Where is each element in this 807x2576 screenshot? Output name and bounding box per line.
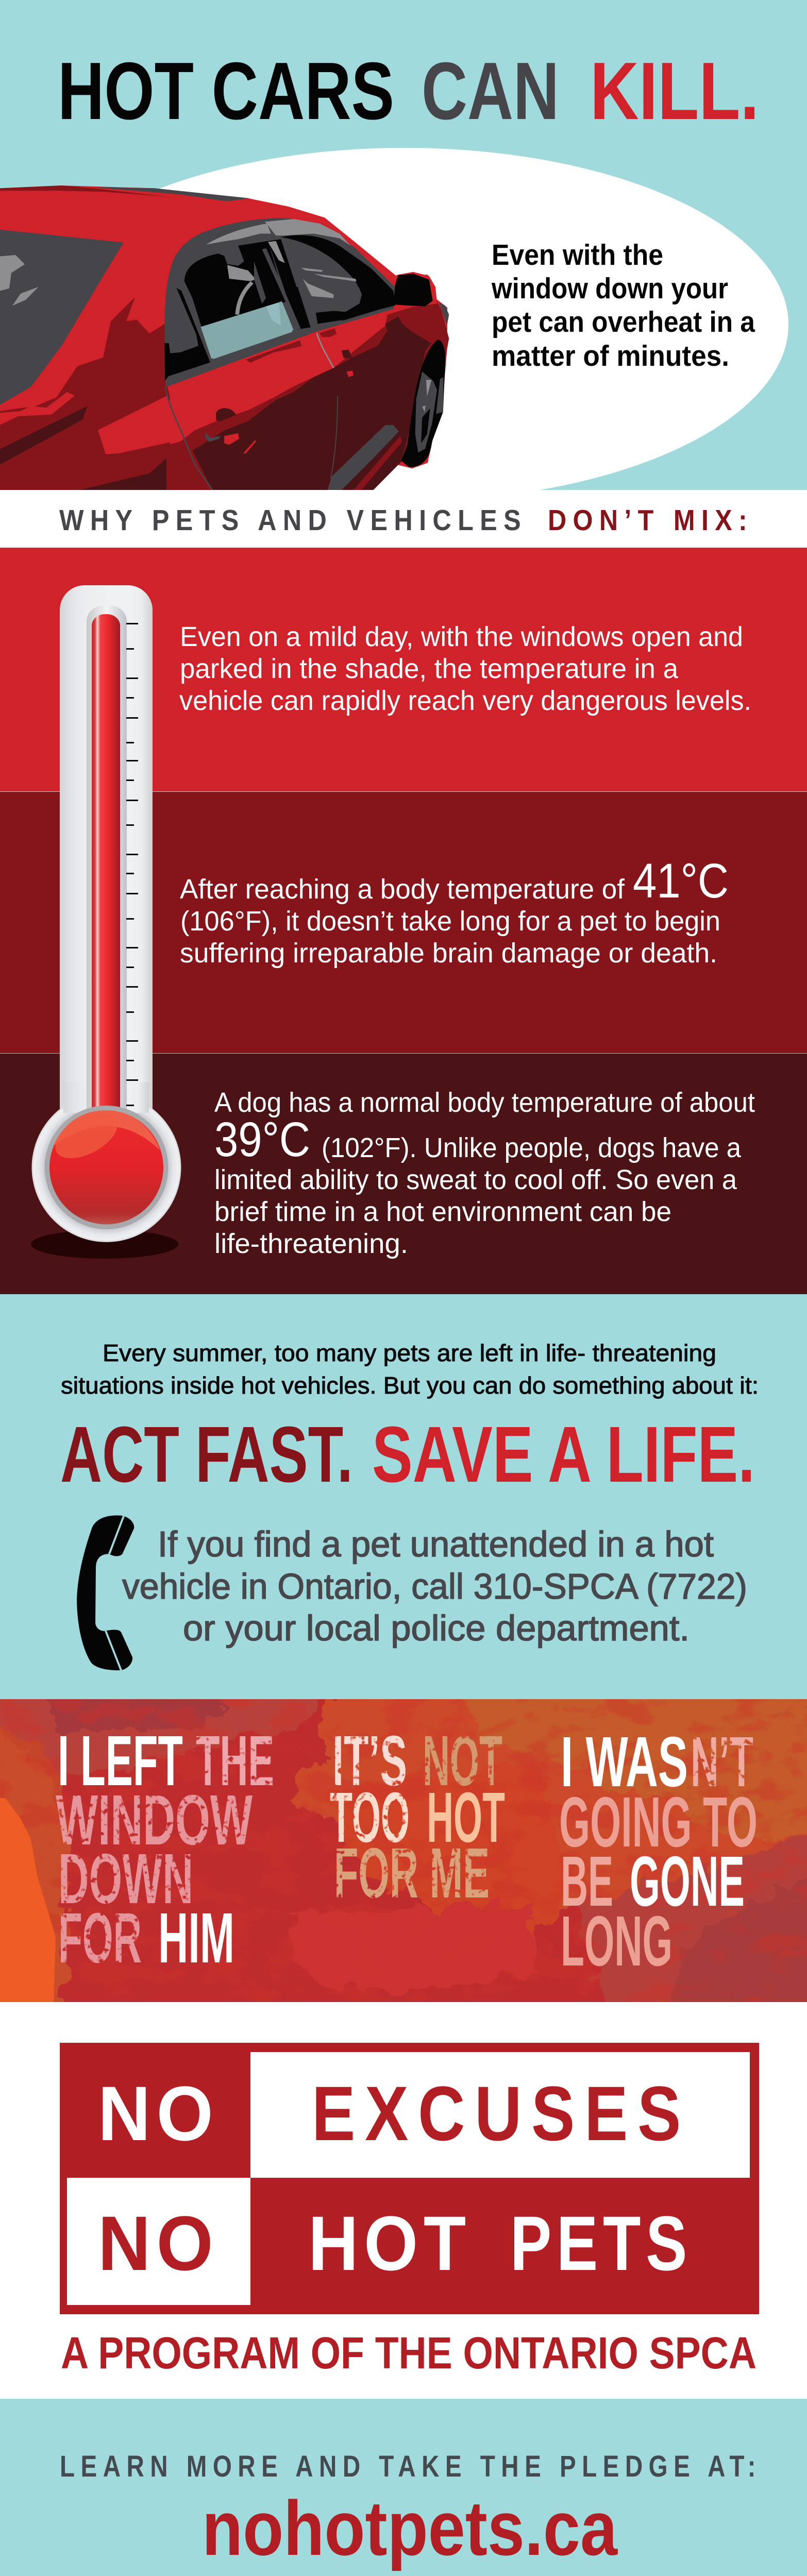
intro text <box>61 1340 759 1399</box>
title: HOT CARS <box>58 46 394 137</box>
callout text: window down your <box>491 272 728 305</box>
white band <box>0 490 807 548</box>
speech bubble ellipse <box>159 148 788 490</box>
callout text: Even with the <box>492 239 663 272</box>
callout text: matter of minutes. <box>492 340 729 372</box>
excuse: it's not too hot for me: TOO <box>330 1778 410 1857</box>
heading: act fast save a life: ACT FAST. <box>60 1410 353 1499</box>
excuse: it's not too hot for me: NOT <box>423 1721 502 1801</box>
title: CAN <box>422 46 559 137</box>
callout text: pet can overheat in a <box>492 306 755 338</box>
text: 41 degrees: 41°C <box>633 854 729 908</box>
text: 41 degrees <box>180 854 729 969</box>
call to action text <box>122 1524 747 1648</box>
orange left strip <box>0 1798 56 2002</box>
logo: no excuses no hot pets: HOT <box>308 2200 472 2286</box>
call to action text: vehicle in Ontario, call 310-SPCA (7722) <box>122 1566 747 1606</box>
excuse: i left the window down for him: HIM <box>158 1899 234 1978</box>
text: 39 degrees: 39°C <box>214 1112 310 1167</box>
excuse: i left the window down for him: THE <box>196 1721 274 1801</box>
hero: speech ellipse and car <box>0 148 788 501</box>
text: mild day: Even on a mild day, with the windows open and <box>180 621 743 652</box>
text: 41 degrees: After reaching a body temperature of <box>180 874 625 905</box>
excuse: i left the window down for him: DOWN <box>58 1839 193 1919</box>
text: 39 degrees: brief time in a hot environment can be <box>214 1196 671 1227</box>
text: 41 degrees: (106°F), it doesn’t take long for a pet to begin <box>180 906 720 937</box>
texture: blotches <box>0 1699 807 2002</box>
panel: mild day <box>0 548 807 791</box>
heading: why pets and vehicles don't mix: WHY PETS AND VEHICLES <box>59 504 527 537</box>
heading: act fast save a life <box>60 1410 755 1499</box>
intro text: Every summer, too many pets are left in life- threatening <box>103 1340 716 1366</box>
heading: why pets and vehicles don't mix: DON’T MIX: <box>548 504 753 537</box>
excuse: i wasn't going to be gone long: BE <box>561 1842 613 1921</box>
title: KILL. <box>590 46 759 137</box>
excuse: i left the window down for him: FOR <box>58 1899 142 1978</box>
footer url: nohotpets.ca <box>202 2485 618 2571</box>
text: 39 degrees: A dog has a normal body temperature of about <box>214 1087 755 1118</box>
excuse: i left the window down for him: WINDOW <box>56 1781 253 1860</box>
text: mild day: parked in the shade, the temperature in a <box>180 653 679 684</box>
logo: no excuses no hot pets <box>60 2043 759 2314</box>
text: 39 degrees <box>214 1087 755 1259</box>
logo: no excuses no hot pets: PETS <box>510 2200 692 2286</box>
logo: no excuses no hot pets: EXCUSES <box>312 2070 691 2157</box>
thermometer scale ticks <box>126 623 138 1106</box>
excuse: i wasn't going to be gone long: LONG <box>561 1902 672 1981</box>
text: 41 degrees: suffering irreparable brain damage or death. <box>180 938 717 969</box>
excuse: i left the window down for him: I LEFT <box>58 1721 183 1801</box>
panel: excuses on hot texture <box>0 1699 807 2002</box>
logo: no excuses no hot pets: NO <box>98 2200 219 2286</box>
call to action text: If you find a pet unattended in a hot <box>158 1524 714 1564</box>
excuse: i wasn't going to be gone long <box>561 1736 756 1966</box>
illustration: red car <box>0 185 449 490</box>
excuse: i wasn't going to be gone long: N’T <box>691 1722 753 1802</box>
texture: painted background <box>0 1699 807 2002</box>
text: mild day: vehicle can rapidly reach very dangerous levels. <box>179 685 751 716</box>
text: 39 degrees: limited ability to sweat to cool off. So even a <box>214 1164 737 1195</box>
logo: no excuses no hot pets: NO <box>98 2070 219 2157</box>
footer panel <box>0 2399 807 2576</box>
intro text: situations inside hot vehicles. But you can do something about it: <box>61 1372 759 1399</box>
icon: telephone handset <box>77 1515 134 1670</box>
excuse: it's not too hot for me: FOR ME <box>334 1834 490 1913</box>
white logo band <box>0 2002 807 2399</box>
text: 39 degrees: life-threatening. <box>214 1228 408 1259</box>
excuse: i wasn't going to be gone long: I WAS <box>561 1722 688 1802</box>
title <box>58 46 759 137</box>
panel: body temperature 41 <box>0 791 807 1053</box>
excuse: it's not too hot for me: HOT <box>427 1778 505 1857</box>
excuse: it's not too hot for me <box>330 1735 505 1898</box>
excuse: i left the window down for him <box>56 1736 273 1963</box>
call to action text: or your local police department. <box>183 1608 690 1648</box>
callout text <box>491 239 755 372</box>
text: mild day <box>179 621 751 716</box>
text: 39 degrees: (102°F). Unlike people, dogs have a <box>322 1132 742 1163</box>
panel: dog temperature 39 <box>0 1053 807 1294</box>
thermometer <box>31 585 181 1259</box>
excuse: it's not too hot for me: IT’S <box>332 1721 407 1801</box>
